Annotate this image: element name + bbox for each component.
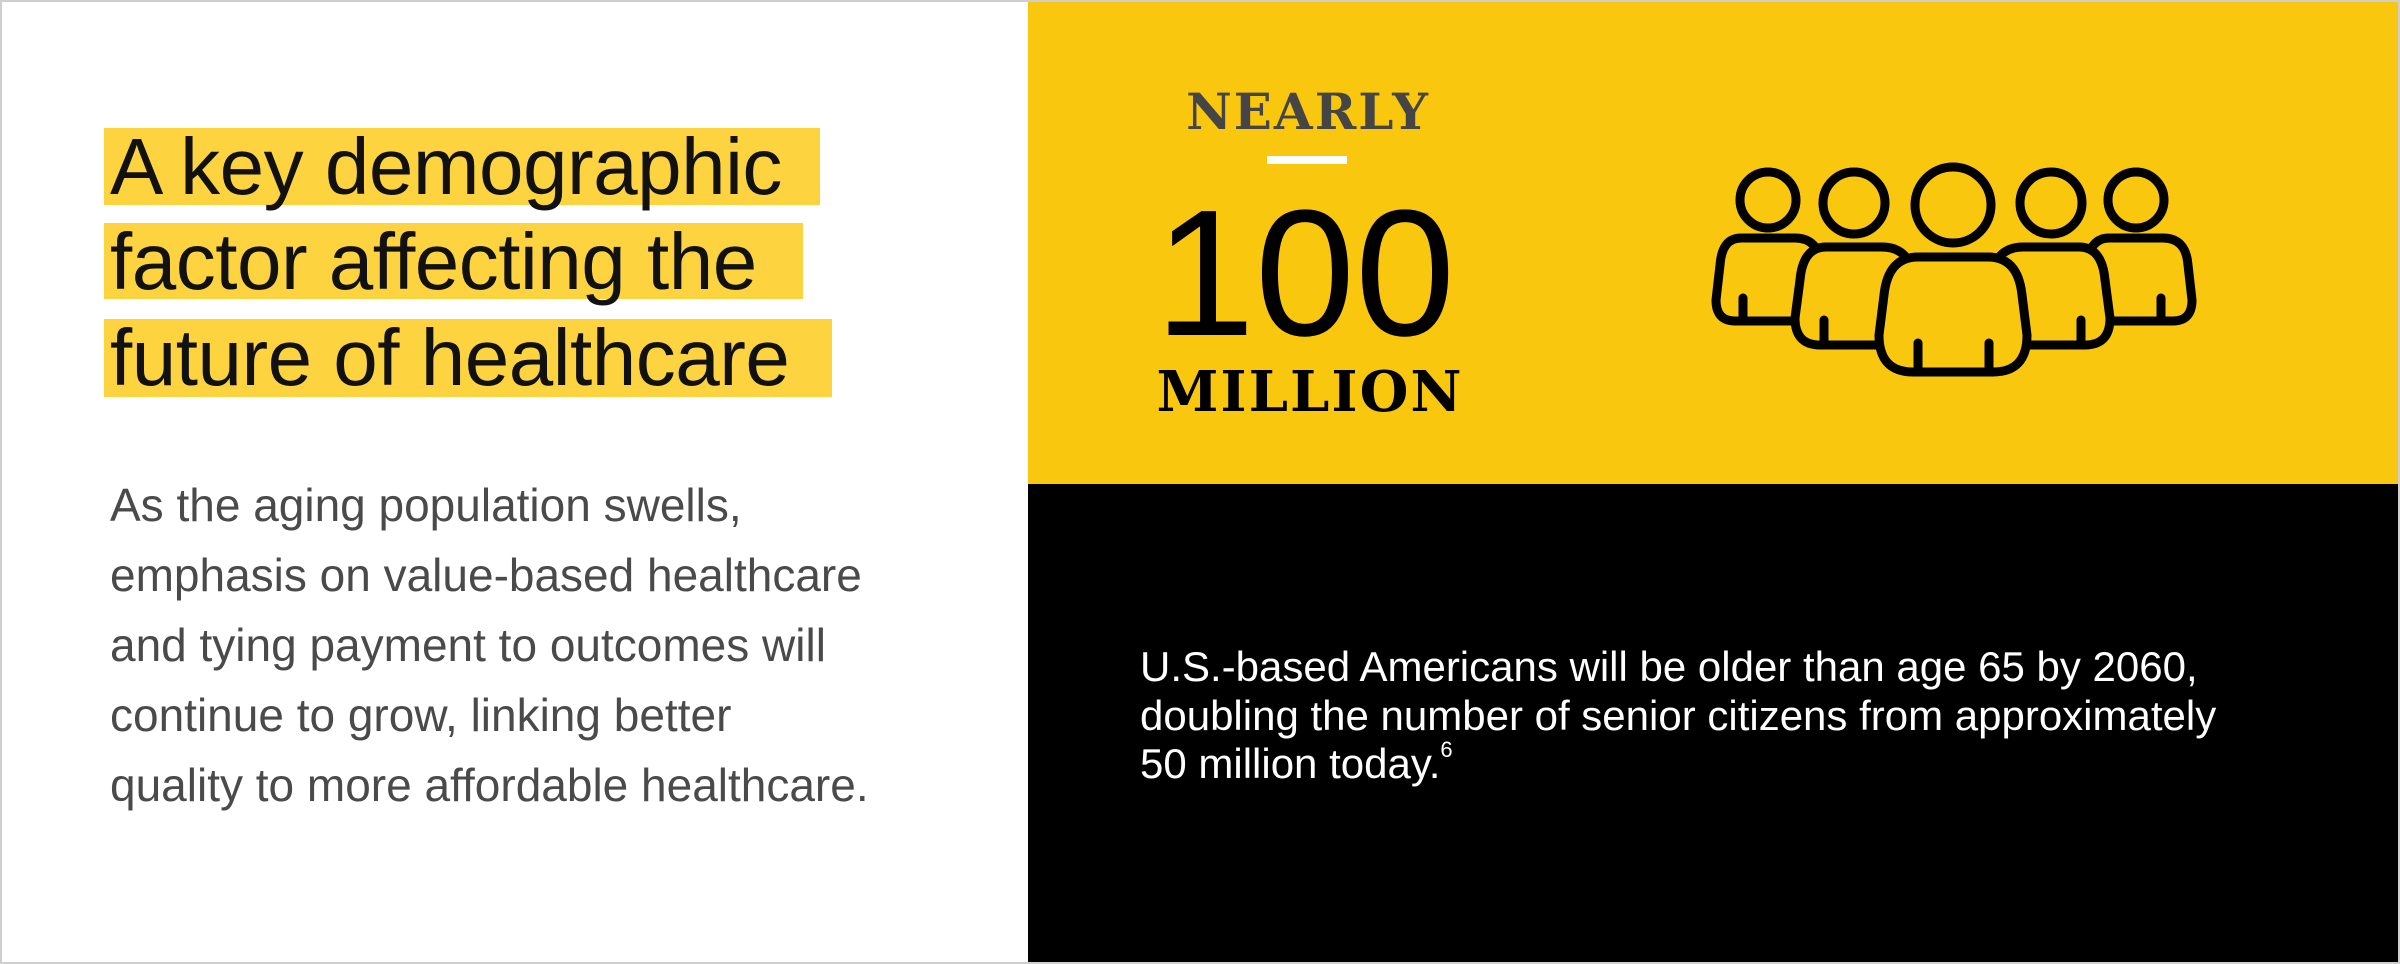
outer left person (1716, 172, 1826, 321)
description text: U.S.-based Americans will be older than age 65 by 2060, (1140, 643, 2198, 690)
icon: group of people (1712, 162, 2196, 376)
description text: 50 million today.6 (1140, 737, 1453, 787)
label: NEARLY: NEARLY (1186, 82, 1430, 141)
body text: quality to more affordable healthcare. (110, 759, 869, 811)
second left person (1795, 172, 1920, 345)
second right person (1985, 172, 2110, 345)
body text (110, 479, 869, 811)
panel: black description (1028, 484, 2398, 962)
description text: doubling the number of senior citizens from approximately (1140, 692, 2216, 738)
title line 3: future of healthcare (110, 313, 789, 402)
stat number 100: 100 (1155, 173, 1455, 374)
description text (1140, 643, 2216, 787)
divider bar (1267, 156, 1347, 164)
outer right person (2082, 172, 2192, 321)
center person (1879, 167, 2027, 372)
title (104, 122, 832, 402)
panel: yellow stat (1028, 2, 2398, 484)
label: MILLION: MILLION (1156, 359, 1464, 425)
body text: emphasis on value-based healthcare (110, 549, 862, 601)
title line 1: A key demographic (110, 122, 782, 211)
body text: As the aging population swells, (110, 479, 742, 531)
body text: continue to grow, linking better (110, 689, 731, 741)
body text: and tying payment to outcomes will (110, 619, 826, 671)
title line 2: factor affecting the (110, 217, 757, 306)
